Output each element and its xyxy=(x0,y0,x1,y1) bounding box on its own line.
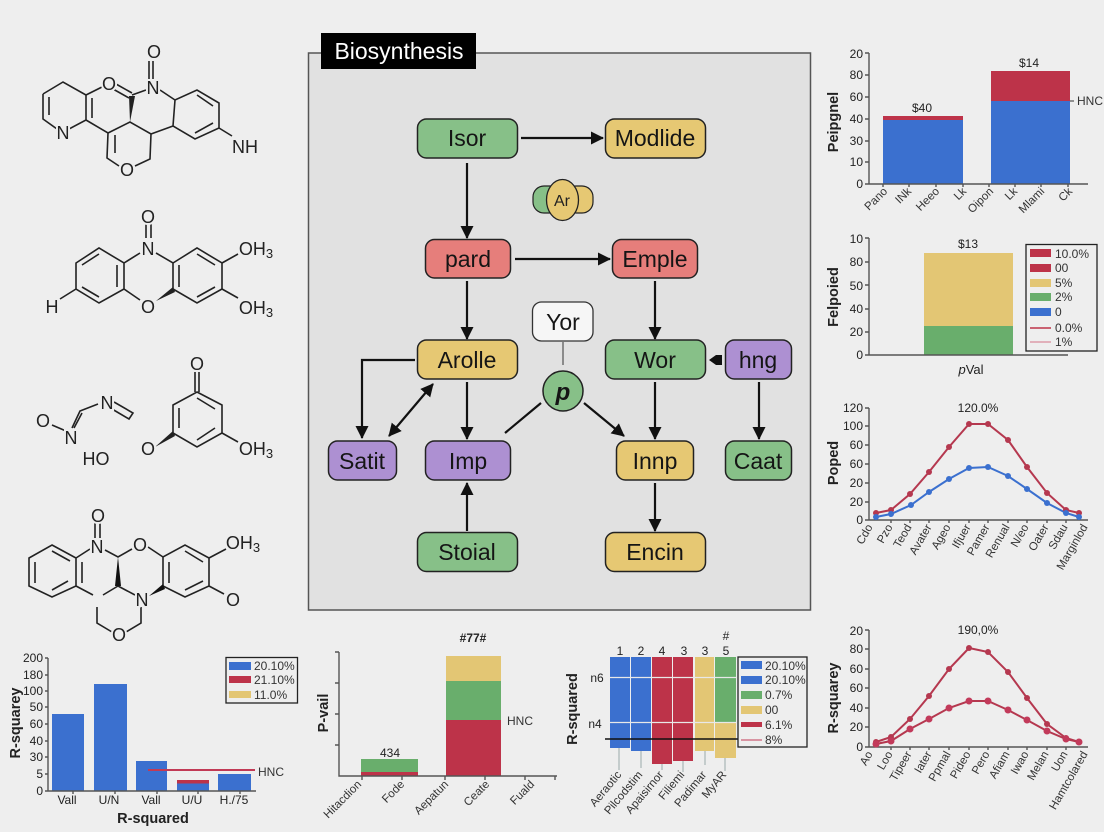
chart: top-right stacked bars: 80 xyxy=(850,68,863,82)
node: Stoial xyxy=(418,532,518,572)
chart: bottom-left bar chart: U/U xyxy=(182,793,202,807)
chart: line chart Poped: 100 xyxy=(843,419,863,433)
chart: line chart Poped: Cdo xyxy=(855,522,876,547)
node: Modlide xyxy=(606,119,706,158)
chart: line chart Poped: 60 xyxy=(850,457,863,471)
molecule 3: O xyxy=(36,411,50,431)
chart: line chart Poped xyxy=(826,401,1091,572)
chart: line chart R-squarey: 40 xyxy=(850,701,863,715)
node: Isor xyxy=(418,119,518,158)
legend: 2% xyxy=(1055,290,1073,304)
chart: bottom-left bar chart: 200 xyxy=(23,651,43,665)
chart: bottom-third column heat bars: 2 xyxy=(638,644,645,658)
chart: line chart Poped: Marginlod xyxy=(1055,522,1091,572)
legend: 20.10% xyxy=(765,659,806,673)
node: pard xyxy=(426,240,510,278)
chart: bottom-left bar chart xyxy=(8,651,298,827)
chart: single stacked bar with legend: 80 xyxy=(850,255,863,269)
molecule 4: N xyxy=(90,537,104,557)
legend: 8% xyxy=(765,733,783,747)
chart: top-right stacked bars: 40 xyxy=(850,112,863,126)
chart: bottom-middle stacked bars: Hitacdion xyxy=(322,779,364,821)
node: Innp xyxy=(616,441,694,480)
chart: top-right stacked bars: 20 xyxy=(850,47,863,61)
molecule 3: N xyxy=(64,428,78,448)
chart: bottom-left bar chart: 50 xyxy=(30,700,43,714)
chart: single stacked bar with legend xyxy=(826,232,1097,377)
molecule 4: O xyxy=(91,506,105,526)
heading: Biosynthesis: Biosynthesis xyxy=(334,38,464,64)
chart: bottom-third column heat bars xyxy=(565,629,807,817)
molecule 4: O xyxy=(112,625,126,645)
chart: line chart Poped: Teod xyxy=(892,522,915,550)
chart: line chart R-squarey: 60 xyxy=(850,662,863,676)
node: Innp: Innp xyxy=(633,448,677,474)
node: Imp xyxy=(426,441,510,480)
molecule 2: O xyxy=(141,297,155,317)
legend: 20.10% xyxy=(765,673,806,687)
molecule 1: O xyxy=(102,74,116,94)
node: Encin: Encin xyxy=(626,539,684,565)
node: Stoial: Stoial xyxy=(438,539,496,565)
icon: Ar enzyme xyxy=(533,180,593,220)
node: pard: pard xyxy=(445,246,491,272)
chart: line chart R-squarey: Tipeer xyxy=(888,749,915,783)
chart: top-right stacked bars: 30 xyxy=(850,134,863,148)
chart: top-right stacked bars: HNC xyxy=(1077,94,1103,108)
chart: line chart Poped: Sdau xyxy=(1047,522,1071,552)
chart: bottom-left bar chart: U/N xyxy=(99,793,119,807)
chart: line chart R-squarey: Iwao xyxy=(1009,750,1032,777)
legend: 0.0% xyxy=(1055,321,1083,335)
legend: 00 xyxy=(765,703,779,717)
chart: line chart Poped: Ifjuer xyxy=(950,522,974,551)
chart: top-right stacked bars: Pano xyxy=(863,186,890,213)
pathway arrows xyxy=(362,138,759,531)
chart: line chart R-squarey: Afiam xyxy=(988,750,1013,781)
node: p: p xyxy=(555,379,570,406)
chart: line chart Poped: 120.0% xyxy=(958,401,999,415)
chart: line chart R-squarey: Pero xyxy=(970,750,993,777)
chart: bottom-middle stacked bars: 434 xyxy=(380,746,400,760)
molecule 3: HO xyxy=(82,449,110,469)
molecule 4: N xyxy=(136,590,148,610)
chart: bottom-third column heat bars: n4 xyxy=(588,717,602,731)
legend: 00 xyxy=(1055,261,1069,275)
node: Arolle: Arolle xyxy=(438,347,496,373)
chart: top-right stacked bars: Heeo xyxy=(914,186,942,214)
chart: bottom-left bar chart: HNC xyxy=(258,765,284,779)
chart: bottom-left bar chart: 100 xyxy=(23,684,43,698)
legend: 5% xyxy=(1055,276,1073,290)
chart: bottom-middle stacked bars: Fode xyxy=(380,779,407,806)
node: Isor: Isor xyxy=(448,125,487,151)
legend: 0.7% xyxy=(765,688,793,702)
chart: line chart R-squarey: Pideo xyxy=(948,750,974,781)
chart: line chart Poped: Pzo xyxy=(875,522,896,546)
node: Wor: Wor xyxy=(634,347,676,373)
chart: line chart R-squarey: 0 xyxy=(856,740,863,754)
molecule 2: 3 xyxy=(266,305,273,320)
chart: bottom-middle stacked bars: Fuald xyxy=(508,779,537,807)
chart: line chart Poped: Ageo xyxy=(930,522,954,552)
molecule 4: OH xyxy=(226,533,253,553)
legend xyxy=(1026,244,1097,351)
chart: bottom-left bar chart: 180 xyxy=(23,668,43,682)
molecule 2: 3 xyxy=(266,246,273,261)
molecule 1: O xyxy=(147,42,161,62)
chart: single stacked bar with legend: 20 xyxy=(850,325,863,339)
chart: line chart R-squarey: 20 xyxy=(850,624,863,638)
chart: line chart Poped: Avater xyxy=(908,522,935,557)
chart: single stacked bar with legend: 40 xyxy=(850,302,863,316)
node: Emple xyxy=(612,240,698,278)
chart: single stacked bar with legend: 10 xyxy=(850,232,863,246)
chart: bottom-third column heat bars: Padimar xyxy=(673,769,709,810)
chart: line chart Poped: 20 xyxy=(850,476,863,490)
molecule 3: O xyxy=(190,354,204,374)
chart: line chart Poped: Poped xyxy=(826,441,842,485)
chart: bottom-third column heat bars: Filiemi xyxy=(657,769,687,802)
node: Imp: Imp xyxy=(449,448,487,474)
chart: top-right stacked bars: Lk xyxy=(1003,185,1020,203)
molecule 1: N xyxy=(56,123,70,143)
molecule 1: O xyxy=(120,160,134,180)
molecule 2: H xyxy=(46,297,58,317)
chart: bottom-left bar chart: R-squarey xyxy=(8,688,24,758)
chart: line chart Poped: Renual xyxy=(984,522,1013,560)
chart: line chart R-squarey xyxy=(826,623,1091,812)
icon: Ar enzyme: Ar xyxy=(554,193,571,210)
chart: line chart R-squarey: Loo xyxy=(876,750,896,772)
node: Caat: Caat xyxy=(734,448,783,474)
node: hng: hng xyxy=(739,347,777,373)
molecule 4: O xyxy=(133,535,147,555)
chart: line chart R-squarey: Melan xyxy=(1026,750,1052,783)
legend: 0 xyxy=(1055,305,1062,319)
chart: bottom-left bar chart: 40 xyxy=(30,734,43,748)
chart: line chart Poped: Pamer xyxy=(965,522,993,558)
chart: top-right stacked bars: 60 xyxy=(850,90,863,104)
chart: top-right stacked bars: Mlami xyxy=(1017,186,1047,216)
chart: bottom-third column heat bars: 3 xyxy=(702,644,709,658)
chart: line chart R-squarey: R-squarey xyxy=(826,663,842,733)
heading: Biosynthesis xyxy=(321,33,476,69)
chart: line chart Poped: 20 xyxy=(850,495,863,509)
molecule 3: N xyxy=(100,393,114,413)
chart: bottom-left bar chart: 0 xyxy=(36,784,43,798)
chart: line chart R-squarey: Ppmal xyxy=(927,750,954,784)
molecule 3: O xyxy=(141,439,155,459)
legend: 10.0% xyxy=(1055,247,1089,261)
chart: top-right stacked bars: Oipon xyxy=(966,186,996,216)
molecule 4: O xyxy=(226,590,240,610)
node: Satit xyxy=(328,441,396,480)
chart: line chart Poped: Oater xyxy=(1027,522,1052,553)
chart: bottom-third column heat bars: R-squared xyxy=(565,673,581,745)
molecule 4: 3 xyxy=(253,540,260,555)
molecule 3: 3 xyxy=(266,446,273,461)
molecule 2: N xyxy=(142,239,154,259)
molecule 1: NH xyxy=(232,137,258,157)
legend xyxy=(738,657,807,747)
legend: 1% xyxy=(1055,335,1073,349)
chart: top-right stacked bars xyxy=(826,47,1103,216)
node: Wor xyxy=(606,340,706,379)
molecule 3 xyxy=(36,354,273,469)
chart: top-right stacked bars: INk xyxy=(893,185,914,206)
chart: line chart R-squarey: 80 xyxy=(850,642,863,656)
chart: line chart Poped: 120 xyxy=(843,401,863,415)
chart: bottom-left bar chart: R-squared xyxy=(117,811,189,827)
panel: biosynthesis pathway xyxy=(308,33,810,610)
molecule 4 xyxy=(29,506,260,645)
legend: 6.1% xyxy=(765,718,793,732)
molecule 2 xyxy=(46,207,273,320)
legend xyxy=(226,658,298,703)
chart: bottom-third column heat bars: Pilcodstim xyxy=(602,769,645,817)
chart: bottom-third column heat bars: MyAR xyxy=(700,769,729,801)
chart: bottom-third column heat bars: n6 xyxy=(590,671,604,685)
chart: line chart Poped: 0 xyxy=(856,513,863,527)
node: Yor xyxy=(532,302,593,341)
legend: 11.0% xyxy=(254,688,287,702)
molecule 1: N xyxy=(146,78,160,98)
chart: bottom-left bar chart: Vall xyxy=(57,793,77,807)
chart: single stacked bar with legend: 0 xyxy=(856,348,863,362)
chart: bottom-third column heat bars: # xyxy=(723,629,730,643)
chart: line chart R-squarey: Uon xyxy=(1050,750,1071,774)
chart: line chart R-squarey: 60 xyxy=(850,681,863,695)
molecule 1 xyxy=(43,42,258,180)
chart: bottom-third column heat bars: 4 xyxy=(659,644,666,658)
chart: line chart Poped: 60 xyxy=(850,438,863,452)
node: Encin xyxy=(606,532,706,572)
chart: bottom-middle stacked bars: Aepatun xyxy=(412,779,451,817)
chart: bottom-third column heat bars: Aeraotic xyxy=(588,769,624,809)
chart: top-right stacked bars: Lk xyxy=(952,185,969,203)
node: Yor: Yor xyxy=(546,309,580,335)
chart: bottom-third column heat bars: Apaisirnor xyxy=(624,769,666,817)
molecule 2: OH xyxy=(239,298,266,318)
chart: top-right stacked bars: $14 xyxy=(1019,56,1039,70)
chart: bottom-third column heat bars: 5 xyxy=(723,644,730,658)
chart: top-right stacked bars: 0 xyxy=(856,177,863,191)
node: Arolle xyxy=(418,340,518,379)
molecule 2: OH xyxy=(239,239,266,259)
chart: line chart R-squarey: Hamtcolared xyxy=(1048,750,1091,812)
chart: top-right stacked bars: Ck xyxy=(1057,185,1075,204)
chart: single stacked bar with legend: pVal xyxy=(957,362,984,377)
legend: 20.10% xyxy=(254,659,295,673)
chart: bottom-middle stacked bars: P-vail xyxy=(316,694,332,732)
chart: bottom-left bar chart: 60 xyxy=(30,717,43,731)
node: Satit: Satit xyxy=(339,448,386,474)
chart: bottom-middle stacked bars xyxy=(316,631,557,821)
chart: bottom-middle stacked bars: Ceate xyxy=(462,779,492,809)
chart: bottom-third column heat bars: 1 xyxy=(617,644,624,658)
chart: bottom-left bar chart: H./75 xyxy=(220,793,249,807)
chart: line chart R-squarey: 20 xyxy=(850,720,863,734)
chart: single stacked bar with legend: 50 xyxy=(850,279,863,293)
chart: bottom-third column heat bars: 3 xyxy=(681,644,688,658)
chart: line chart R-squarey: Ao xyxy=(858,750,876,768)
molecule 2: O xyxy=(141,207,155,227)
chart: bottom-left bar chart: Vall xyxy=(141,793,161,807)
node: hng xyxy=(726,340,792,379)
chart: bottom-middle stacked bars: HNC xyxy=(507,714,533,728)
node: Caat xyxy=(726,441,792,480)
node: p xyxy=(543,371,583,411)
legend: 21.10% xyxy=(254,673,295,687)
chart: line chart Poped: N/eo xyxy=(1009,522,1032,550)
chart: bottom-left bar chart: 30 xyxy=(30,750,43,764)
node: Emple: Emple xyxy=(622,246,688,272)
chart: single stacked bar with legend: $13 xyxy=(958,237,978,251)
chart: line chart R-squarey: 190,0% xyxy=(958,623,999,637)
chart: single stacked bar with legend: Felpoied xyxy=(826,267,842,327)
molecule 3: OH xyxy=(239,439,266,459)
chart: bottom-left bar chart: 5 xyxy=(36,767,43,781)
chart: top-right stacked bars: Peipgnel xyxy=(826,92,842,152)
chart: line chart R-squarey: Iater xyxy=(913,749,935,775)
chart: top-right stacked bars: $40 xyxy=(912,101,932,115)
node: Modlide: Modlide xyxy=(615,125,695,151)
chart: top-right stacked bars: 10 xyxy=(850,155,863,169)
chart: bottom-middle stacked bars: #77# xyxy=(460,631,487,645)
